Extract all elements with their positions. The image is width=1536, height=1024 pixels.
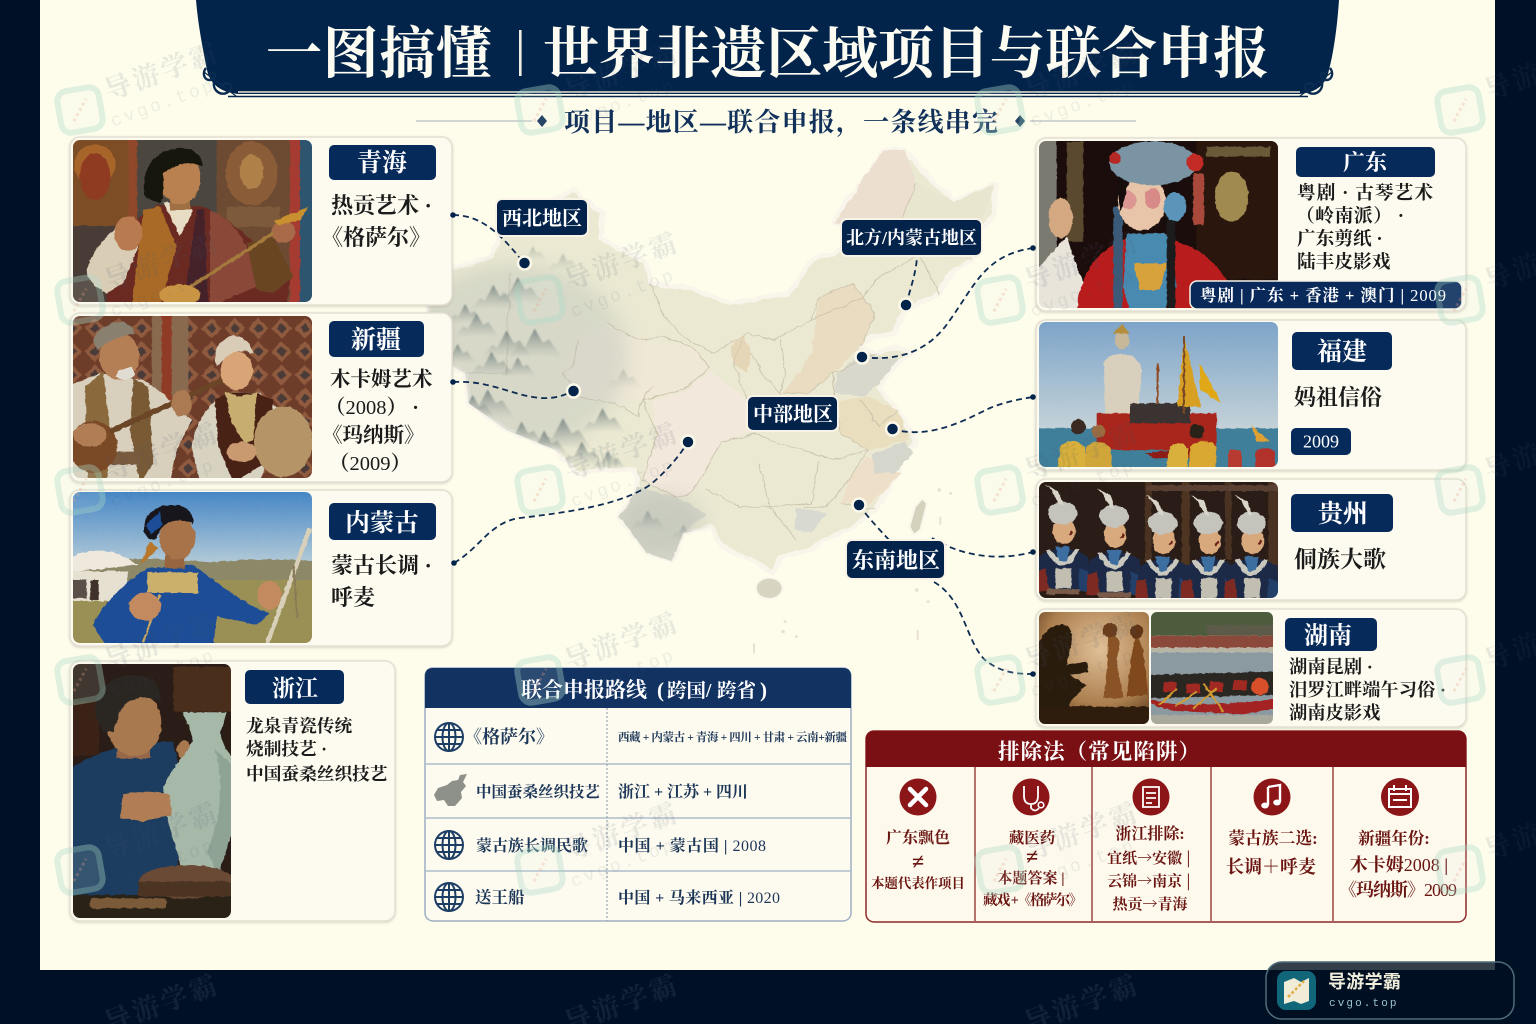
label: Inner Mongolia: [329, 503, 436, 540]
label: Hunan: [1285, 618, 1377, 651]
label: Zhejiang: 浙江: [272, 676, 318, 701]
text: Zhejiang items: 中国蚕桑丝织技艺: [246, 763, 388, 784]
column: Tibetan medicine trap: [983, 778, 1083, 909]
photo: Dong singers: [1039, 482, 1278, 598]
subtitle: [416, 107, 1136, 138]
watermarks: cvgo.top: [568, 456, 679, 513]
icon: document: [1132, 778, 1170, 816]
watermarks: 导游学霸: [100, 417, 223, 486]
label: Guangdong: 广东: [1343, 150, 1389, 175]
panel header: 排除法（常见陷阱）: [998, 740, 1200, 764]
text: Guangdong items: 广东剪纸 ·: [1297, 228, 1383, 250]
row: Mongolian long song: 中国 + 蒙古国 | 2008: [618, 836, 766, 855]
column: Xinjiang trap: [1339, 778, 1457, 900]
right card: Fujian: [1033, 317, 1466, 473]
watermarks: cvgo.top: [108, 76, 219, 133]
column: Tibetan medicine trap: 藏戏 +《格萨尔》: [983, 891, 1083, 909]
brand badge: [1266, 962, 1514, 1019]
column: Zhejiang trap: 云锦→南京 |: [1107, 870, 1191, 891]
subtitle: 项目—地区—联合申报，一条线串完: [564, 107, 998, 138]
text: Inner Mongolia items: [331, 553, 432, 610]
column: Mongolian trap: [1226, 778, 1318, 877]
column: Mongolian trap: 长调＋呼麦: [1226, 856, 1316, 877]
brand text: cvgo.top: [1329, 998, 1399, 1010]
strip: Guangdong application: 粤剧 | 广东 + 香港 + 澳门 | 2009: [1200, 285, 1446, 305]
row: Mongolian long song: [435, 831, 766, 859]
label: Inner Mongolia: 内蒙古: [345, 509, 419, 537]
label: Hunan: 湖南: [1304, 622, 1352, 650]
column: Xinjiang trap: 新疆年份:: [1358, 828, 1430, 848]
table header: (: [657, 678, 664, 702]
table header: 跨国/: [667, 680, 712, 702]
icon: music note: [1254, 778, 1290, 816]
column: Tibetan medicine trap: ≠: [1026, 844, 1038, 869]
column: Tibetan medicine trap: 藏医药: [1009, 828, 1055, 847]
label: Guizhou: [1291, 494, 1393, 532]
watermarks: cvgo.top: [1028, 646, 1139, 703]
row: Wangchuan boat: 中国 + 马来西亚 | 2020: [618, 888, 780, 907]
photo: dragon boats: [1151, 612, 1273, 724]
watermarks: 导游学霸: [1020, 797, 1143, 866]
watermarks: cvgo.top: [568, 836, 679, 893]
label: Fujian: 福建: [1317, 338, 1367, 366]
photo: celadon artisan: [73, 664, 231, 918]
title banner: [196, 0, 1339, 96]
icon: China map: [434, 774, 467, 806]
label: Xinjiang: 新疆: [351, 326, 401, 354]
text: Qinghai items: [321, 193, 432, 250]
text: Guangdong items: 粤剧 · 古琴艺术: [1297, 182, 1433, 204]
text: Guangdong items: （岭南派） ·: [1296, 205, 1404, 227]
photo: Mazu festival: [1039, 322, 1278, 467]
text: Hunan items: 汨罗江畔端午习俗 ·: [1289, 680, 1446, 700]
label: Fujian year: [1291, 428, 1351, 455]
left card: Inner Mongolia: [67, 487, 452, 647]
table header: [425, 668, 851, 708]
icon: globe: [435, 831, 463, 859]
label: North / Inner Mongolia region: 北方/内蒙古地区: [846, 227, 977, 248]
column: Tibetan medicine trap: 本题答案 |: [997, 869, 1065, 887]
column: Mongolian trap: 蒙古族二选:: [1228, 828, 1318, 848]
watermarks: 导游学霸: [1020, 607, 1143, 676]
right card: Guangdong: [1033, 136, 1466, 313]
watermarks: 导游学霸: [560, 417, 683, 486]
column: Zhejiang trap: [1107, 778, 1191, 914]
watermarks: cvgo.top: [568, 646, 679, 703]
label: North / Inner Mongolia region: [841, 219, 982, 256]
icon: globe: [435, 723, 463, 751]
photo: Xinjiang musicians: [73, 316, 312, 478]
icon: right scroll ornament: [1300, 68, 1332, 96]
watermarks: cvgo.top: [568, 76, 679, 133]
right card: Guizhou: [1033, 477, 1466, 604]
watermarks: cvgo.top: [1028, 836, 1139, 893]
text: Zhejiang items: 烧制技艺 ·: [245, 738, 327, 759]
column: Guangdong trap: [871, 778, 965, 891]
label: Fujian year: 2009: [1303, 432, 1339, 452]
watermarks: 导游学霸: [100, 607, 223, 676]
watermarks: cvgo.top: [1028, 76, 1139, 133]
watermarks: cvgo.top: [1028, 456, 1139, 513]
table header: 跨省: [717, 680, 758, 702]
connector routes: [453, 215, 1033, 674]
column: Guangdong trap: 本题代表作项目: [871, 875, 965, 891]
text: Inner Mongolia items: 蒙古长调 ·: [331, 553, 432, 578]
map of China: [401, 150, 996, 653]
watermarks: 导游学霸: [1020, 417, 1143, 486]
label: Northwest region: 西北地区: [502, 207, 582, 230]
column: Guangdong trap: 广东飘色: [886, 828, 950, 847]
label: Xinjiang: [329, 321, 424, 357]
watermarks: cvgo.top: [108, 836, 219, 893]
brand text: [1328, 971, 1401, 1010]
label: Fujian: [1292, 332, 1392, 370]
panel header: [866, 731, 1466, 767]
route end dots: [450, 212, 1036, 677]
right card: Hunan: [1033, 607, 1466, 729]
left card: Xinjiang: [67, 310, 452, 483]
photo: Qinghai singer: [73, 140, 312, 302]
strip: Guangdong application: [1190, 281, 1462, 309]
row: silk: 浙江 + 江苏 + 四川: [618, 782, 748, 801]
watermarks: 导游学霸: [1020, 37, 1143, 106]
brand text: 导游学霸: [1328, 971, 1401, 992]
row: Wangchuan boat: [435, 883, 780, 911]
label: Zhejiang: [245, 670, 344, 704]
label: Southeast region: 东南地区: [852, 548, 940, 573]
watermarks: 导游学霸: [100, 227, 223, 296]
column: Xinjiang trap: 木卡姆2008 |: [1350, 855, 1448, 875]
icon: brand map: [1277, 971, 1316, 1010]
row: Gesar: [435, 723, 848, 751]
column: Guangdong trap: ≠: [912, 849, 924, 874]
text: Xinjiang items: （2008） ·: [325, 396, 419, 419]
text: Hunan items: 湖南皮影戏: [1289, 702, 1380, 723]
photo: Cantonese opera: [1033, 136, 1283, 313]
panel: joint application routes table: [425, 668, 851, 921]
table header: 联合申报路线: [521, 678, 647, 702]
column: Zhejiang trap: 浙江排除:: [1115, 824, 1185, 843]
watermarks: cvgo.top: [108, 646, 219, 703]
watermarks: 导游学霸: [1020, 227, 1143, 296]
label: Guizhou: 贵州: [1318, 500, 1368, 528]
watermarks: cvgo.top: [1028, 266, 1139, 323]
text: Xinjiang items: 《玛纳斯》: [322, 424, 424, 447]
watermarks: cvgo.top: [568, 266, 679, 323]
photo: shadow puppets: [1039, 612, 1149, 724]
label: Qinghai: 青海: [357, 149, 407, 177]
title text: 一图搞懂: [266, 24, 492, 86]
text: Zhejiang items: 龙泉青瓷传统: [246, 715, 353, 736]
watermarks: 导游学霸: [560, 227, 683, 296]
row: Wangchuan boat: 送王船: [475, 888, 525, 907]
text: Hunan items: 湖南昆剧 ·: [1289, 656, 1373, 677]
label: Qinghai: [329, 145, 436, 180]
text: Xinjiang items: 木卡姆艺术: [330, 368, 433, 391]
row: Gesar: 《格萨尔》: [464, 726, 554, 747]
column: Zhejiang trap: 热贡→青海: [1112, 893, 1188, 914]
text: Fujian item: 妈祖信俗: [1294, 385, 1383, 410]
text: Qinghai items: 《格萨尔》: [321, 225, 431, 250]
icon: left scroll ornament: [204, 68, 236, 96]
label: Central region: [747, 396, 838, 431]
label: Guangdong: [1296, 147, 1435, 177]
watermarks: 导游学霸: [560, 37, 683, 106]
mountains in the west: [401, 246, 702, 553]
text: Xinjiang items: （2009）: [329, 452, 411, 475]
watermarks: cvgo.top: [108, 266, 219, 323]
panel: elimination method: [866, 731, 1466, 922]
label: Central region: 中部地区: [753, 403, 833, 426]
text: Zhejiang items: [245, 715, 388, 784]
column: Xinjiang trap: 《玛纳斯》2009: [1339, 879, 1457, 900]
text: Guangdong items: [1296, 182, 1433, 273]
icon: stethoscope: [1012, 778, 1050, 816]
text: Guizhou item: 侗族大歌: [1294, 547, 1386, 572]
row: Mongolian long song: 蒙古族长调民歌: [476, 836, 588, 855]
icon: globe: [435, 883, 463, 911]
watermarks: cvgo.top: [108, 456, 219, 513]
icon: cross: [900, 778, 936, 816]
text: Xinjiang items: [322, 368, 433, 475]
column: Zhejiang trap: 宜纸→安徽 |: [1107, 847, 1191, 868]
title banner: 世界非遗区域项目与联合申报: [543, 24, 1269, 86]
watermarks: 导游学霸: [560, 607, 683, 676]
islands: [756, 578, 783, 599]
photo: Mongolian singer: [73, 492, 312, 643]
text: Qinghai items: 热贡艺术 ·: [331, 193, 432, 218]
watermarks: 导游学霸: [100, 37, 223, 106]
watermarks: 导游学霸: [100, 797, 223, 866]
text: Guangdong items: 陆丰皮影戏: [1297, 252, 1391, 273]
left card: Zhejiang: [67, 658, 395, 925]
icon: calendar: [1381, 778, 1419, 816]
row: silk: 中国蚕桑丝织技艺: [476, 782, 600, 801]
row: silk: [434, 774, 748, 806]
watermarks: 导游学霸: [560, 797, 683, 866]
left card: Qinghai: [67, 133, 452, 310]
label: Southeast region: [846, 540, 945, 579]
label: Northwest region: [496, 199, 588, 236]
row: Gesar: 西藏 + 内蒙古 + 青海 + 四川 + 甘肃 + 云南+新疆: [618, 730, 848, 744]
text: Hunan items: [1289, 656, 1446, 723]
text: Inner Mongolia items: 呼麦: [331, 585, 375, 610]
table header: ): [760, 678, 767, 702]
